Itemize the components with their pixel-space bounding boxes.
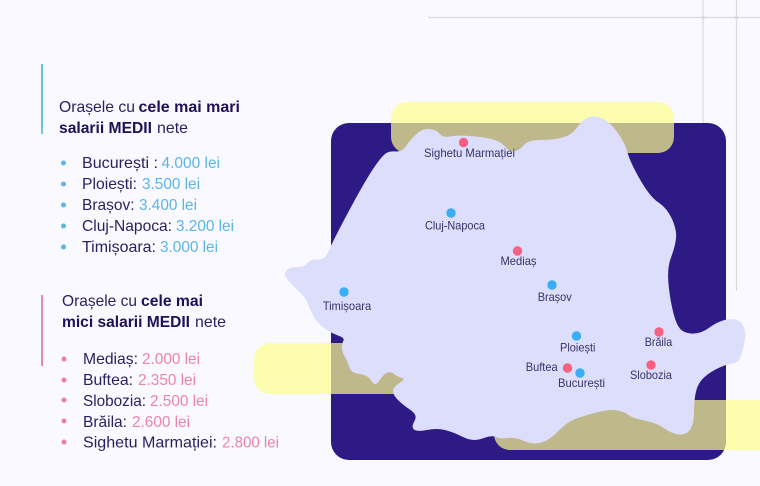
list: largest salaries: 3.500 lei <box>142 176 200 193</box>
accent bar: pink <box>41 295 43 366</box>
heading: largest salaries: cele mai mari <box>138 99 240 116</box>
marker: Sighetu Marmației: Sighetu Marmației <box>424 146 515 160</box>
marker: Brașov: Brașov <box>538 290 572 304</box>
list: smallest salaries: 2.600 lei <box>132 414 190 431</box>
marker: Cluj-Napoca <box>425 208 485 232</box>
list: smallest salaries: Sighetu Marmației: <box>83 434 217 452</box>
marker: Brăila: Brăila <box>645 335 672 349</box>
marker: București: București <box>558 376 605 390</box>
heading: smallest salaries: cele mai <box>141 293 203 310</box>
heading: smallest salaries: nete <box>195 314 226 331</box>
list: smallest salaries <box>62 351 279 452</box>
list: smallest salaries: 2.350 lei <box>138 372 196 389</box>
list: smallest salaries: 2.800 lei <box>222 434 279 452</box>
list: largest salaries: București : <box>82 155 158 172</box>
highlight: top yellow band <box>391 102 674 153</box>
list: smallest salaries: Buftea: <box>83 372 133 389</box>
list: smallest salaries: Slobozia: <box>83 393 146 410</box>
list: largest salaries <box>61 155 234 256</box>
heading: largest salaries: nete <box>157 120 188 137</box>
heading: largest salaries <box>59 99 240 137</box>
heading: smallest salaries: mici salarii MEDII <box>62 314 190 331</box>
marker: Buftea: Buftea <box>526 360 558 374</box>
marker: Mediaș: Mediaș <box>500 254 536 268</box>
marker: Slobozia: Slobozia <box>630 368 672 382</box>
list: largest salaries: Ploiești: <box>82 176 137 193</box>
list: smallest salaries: 2.500 lei <box>150 393 208 410</box>
heading: largest salaries: Orașele cu <box>59 99 135 116</box>
marker: Slobozia <box>630 360 672 382</box>
list: largest salaries: Timișoara: <box>82 239 156 256</box>
list: smallest salaries: Brăila: <box>83 414 127 431</box>
list: largest salaries: 3.000 lei <box>160 239 218 256</box>
heading: smallest salaries <box>62 293 226 331</box>
highlight: bottom yellow band <box>494 400 760 450</box>
marker: Ploiești <box>560 331 596 354</box>
marker: Timișoara: Timișoara <box>323 299 371 313</box>
marker: Sighetu Marmației <box>424 138 515 160</box>
marker: Brăila <box>645 327 672 349</box>
list: smallest salaries: Mediaș: <box>83 351 138 368</box>
list: largest salaries: Cluj-Napoca: <box>82 218 172 235</box>
list: largest salaries: 4.000 lei <box>162 155 220 172</box>
list: largest salaries: 3.200 lei <box>176 218 234 235</box>
marker: Timișoara <box>323 287 371 313</box>
marker: Cluj-Napoca: Cluj-Napoca <box>425 218 485 232</box>
marker: București <box>558 368 605 390</box>
list: smallest salaries: 2.000 lei <box>142 351 200 368</box>
panel: map background <box>331 123 726 460</box>
map: Romania outline <box>285 116 745 443</box>
heading: largest salaries: salarii MEDII <box>59 120 152 137</box>
heading: smallest salaries: Orașele cu <box>62 293 137 310</box>
highlight: left yellow band <box>254 343 424 394</box>
list: largest salaries: 3.400 lei <box>139 197 197 214</box>
marker: Ploiești: Ploiești <box>560 340 596 354</box>
marker: Brașov <box>538 280 572 304</box>
marker: Mediaș <box>500 246 536 268</box>
accent bar: teal <box>41 64 43 134</box>
panel: smallest salaries <box>41 293 279 452</box>
panel: largest salaries <box>41 64 240 256</box>
list: largest salaries: Brașov: <box>82 197 134 214</box>
